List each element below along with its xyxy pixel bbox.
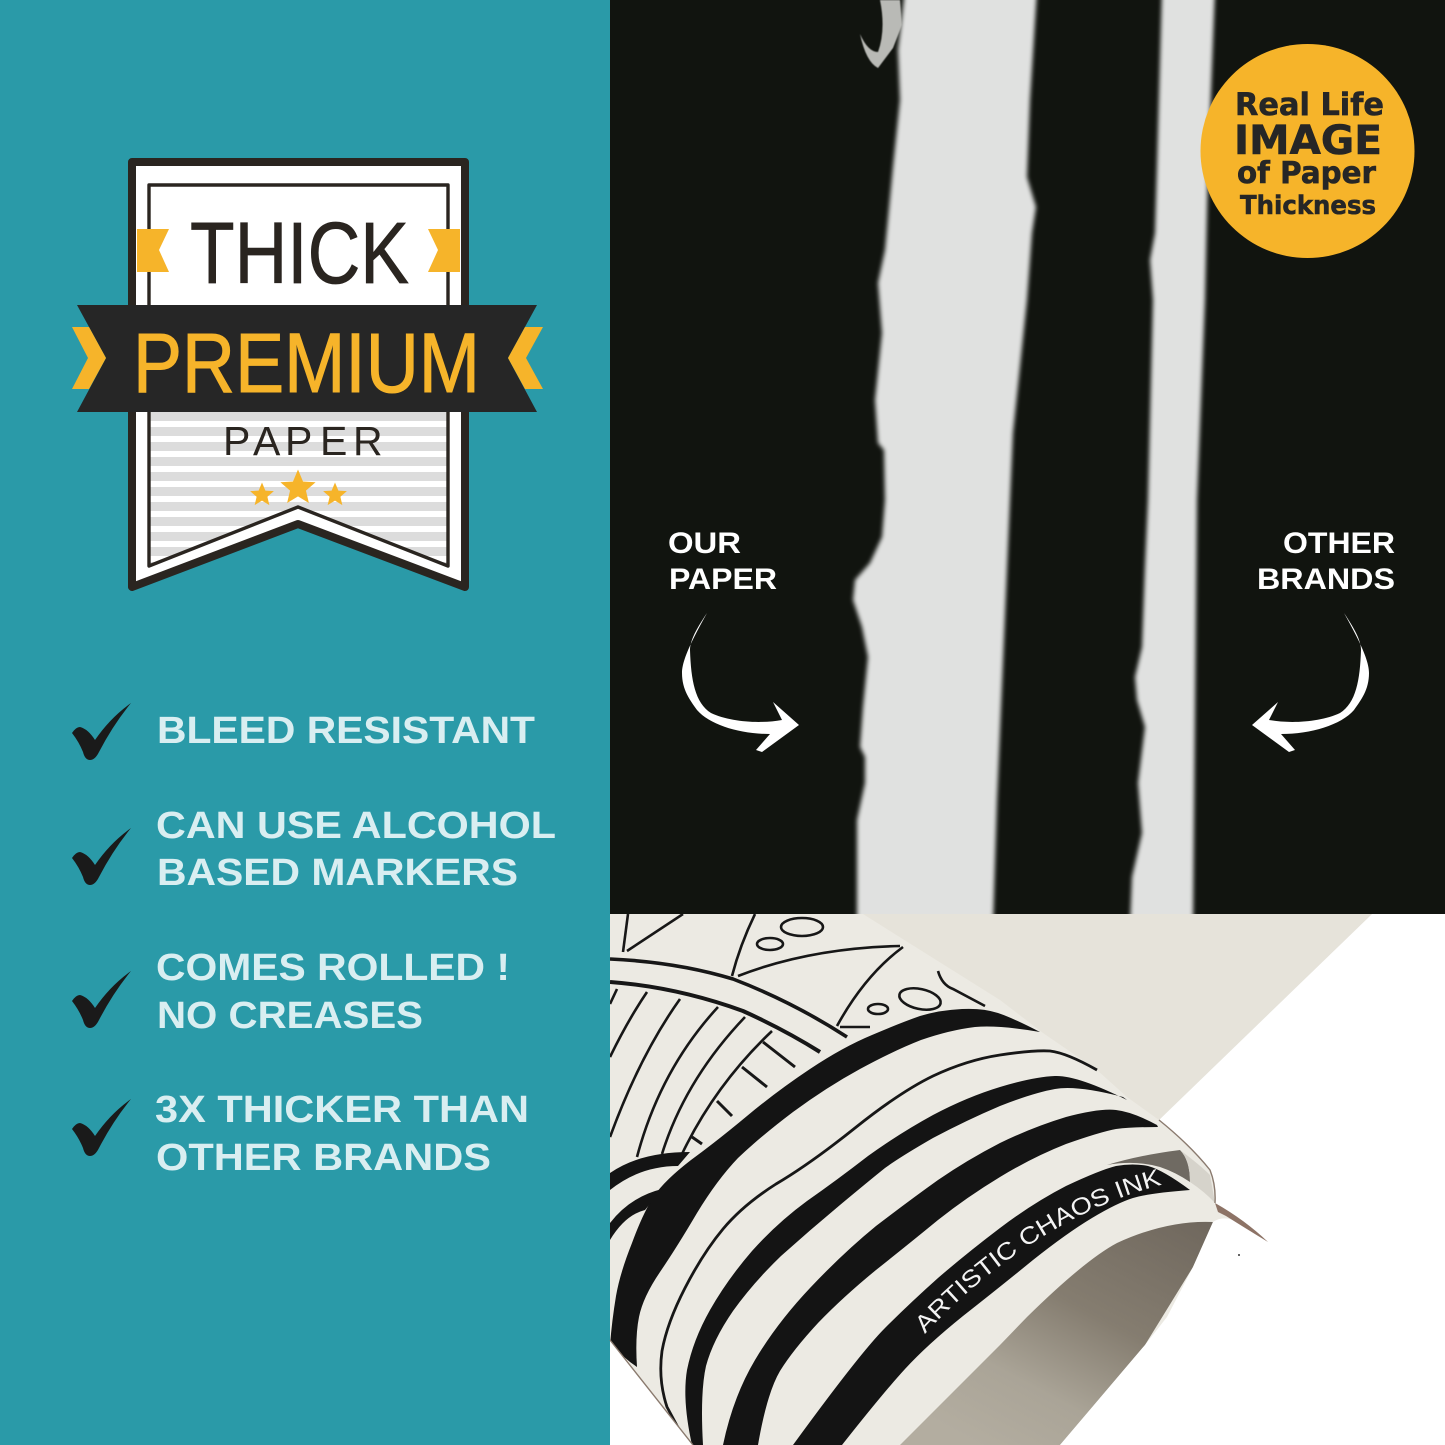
feature: bleed resistant: BLEED RESISTANT: [157, 710, 535, 752]
feature: alcohol markers: [72, 805, 556, 894]
feature: comes rolled: COMES ROLLED !: [156, 947, 510, 989]
dust speck: [1238, 1254, 1240, 1256]
ribbon chevron right: [508, 327, 543, 389]
callout: real life image: of Paper: [1237, 156, 1376, 191]
brand baseline guide: [925, 1186, 1157, 1334]
panel: rolled paper photo: [610, 914, 1372, 1445]
feature: 3x thicker: 3X THICKER THAN: [155, 1089, 529, 1131]
heading: THICK: THICK: [190, 205, 409, 302]
feature: bleed resistant: [72, 703, 535, 760]
panel: teal background: [0, 0, 610, 1445]
heading: PAPER: PAPER: [223, 418, 383, 464]
label: other brands: OTHER: [1283, 527, 1395, 560]
feature: comes rolled: NO CREASES: [157, 995, 423, 1037]
black band 2: [685, 1076, 1127, 1445]
paper wisp: [860, 0, 902, 68]
label: our paper: [668, 527, 777, 596]
feature: 3x thicker: OTHER BRANDS: [156, 1137, 491, 1179]
underside of paper: [900, 1222, 1213, 1445]
text: artistic chaos ink: ARTISTIC CHAOS INK: [918, 1169, 1162, 1334]
label: other brands: [1257, 527, 1395, 596]
ribbon chevron left: [72, 327, 106, 389]
black band 4: [793, 1164, 1190, 1445]
callout: real life image: Thickness: [1240, 191, 1376, 221]
label: our paper: OUR: [668, 527, 741, 560]
arrow: other brands: [1252, 613, 1369, 752]
black band 3: [723, 1110, 1158, 1445]
yellow tab left: [137, 229, 169, 272]
mandala line art: [610, 914, 1097, 1435]
badge stripes: [149, 412, 449, 571]
feature: alcohol markers: BASED MARKERS: [157, 852, 518, 894]
ring arc upper: [610, 1152, 690, 1190]
yellow tab right: [428, 229, 460, 272]
callout: real life image: [1200, 44, 1414, 258]
arrow: our paper: [682, 613, 799, 752]
feature: 3x thicker: [72, 1089, 529, 1179]
badge: thick premium paper: [72, 162, 543, 587]
label: other brands: BRANDS: [1257, 563, 1395, 596]
badge inner outline: [149, 185, 448, 566]
badge body: [132, 162, 465, 587]
callout: real life image: Real Life: [1235, 87, 1384, 123]
callout: real life image: IMAGE: [1234, 118, 1382, 164]
paper tail edge: [1215, 1203, 1268, 1242]
ribbon: [77, 305, 537, 412]
label: our paper: PAPER: [669, 563, 777, 596]
our paper edge: [853, 0, 1037, 925]
other brands edge: [1130, 0, 1215, 925]
feature: comes rolled: [72, 947, 510, 1037]
feature list: [72, 703, 556, 1179]
heading: PREMIUM: PREMIUM: [133, 316, 480, 410]
paper edge tint: [610, 1120, 1215, 1445]
inner fold highlight: [1180, 1150, 1215, 1203]
panel: paper thickness photo: [610, 0, 1445, 925]
black band 1: [610, 1009, 1040, 1367]
inner fold shadow: [1107, 1150, 1190, 1182]
paper sheet: [610, 914, 1372, 1445]
feature: alcohol markers: CAN USE ALCOHOL: [156, 805, 556, 847]
ring arc lower: [610, 1189, 662, 1240]
stars: [250, 470, 347, 505]
paper flap: [863, 914, 1372, 1120]
